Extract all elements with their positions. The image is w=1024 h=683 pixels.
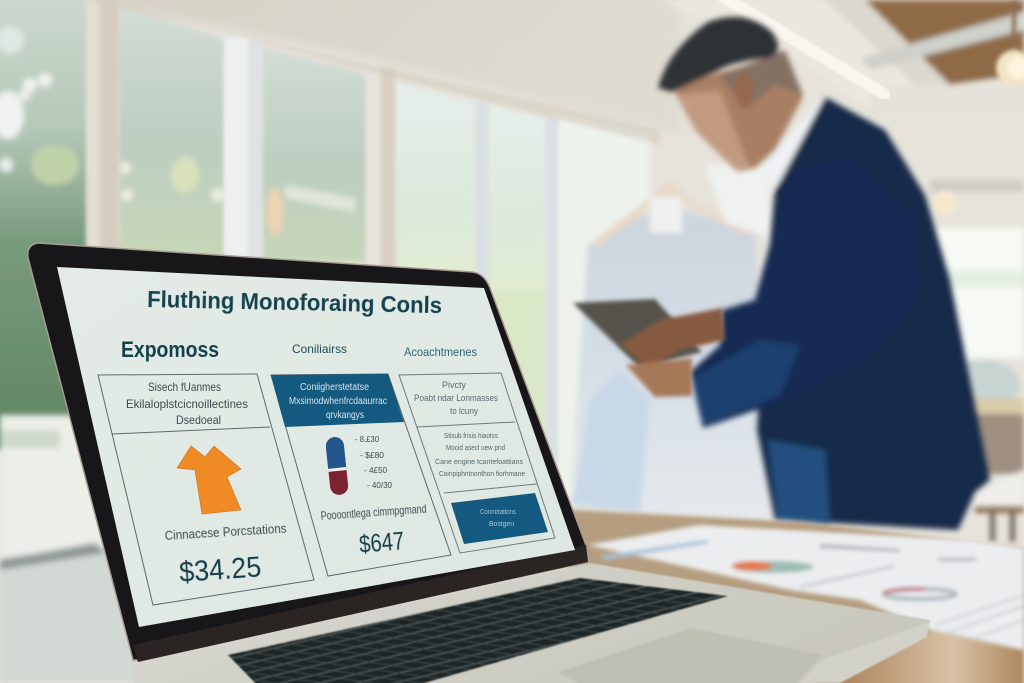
column heading: coniliairss: Coniliairss bbox=[292, 342, 347, 356]
button: blue call to action bbox=[451, 493, 548, 544]
pendant lamps bbox=[933, 0, 1024, 215]
capsule scale labels: - 40/30 bbox=[367, 481, 393, 490]
middle card price: $647 bbox=[358, 527, 405, 559]
ceiling left bbox=[80, 0, 680, 135]
man in navy suit bbox=[658, 17, 990, 530]
window frames bbox=[85, 0, 660, 518]
header text: Coniigherstetatse bbox=[300, 382, 369, 393]
fold line bbox=[800, 566, 895, 587]
chart: donut bbox=[884, 589, 956, 599]
laptop bbox=[28, 243, 930, 683]
capsule scale labels: - $£80 bbox=[360, 451, 385, 460]
button text: Bostgen bbox=[489, 521, 514, 528]
header text bbox=[289, 382, 387, 421]
lower left floor and sill bbox=[0, 415, 200, 683]
left card price: $34.25 bbox=[178, 551, 262, 589]
icon: blue and maroon capsule bbox=[325, 436, 349, 496]
right card detail lines: Cane engine tcantefoattians bbox=[435, 459, 523, 466]
paper reports on desk bbox=[588, 525, 1024, 650]
dashboard title: Fluthing Monoforaing Conls bbox=[147, 286, 442, 318]
right card detail lines: Stisub frisis hiaotss bbox=[444, 433, 498, 440]
left card description bbox=[126, 380, 248, 427]
left card description: Ekilaloplstcicnoillectines bbox=[126, 397, 248, 411]
laptop base bbox=[132, 563, 930, 683]
screen bezel bbox=[28, 243, 588, 660]
wooden desk bbox=[570, 510, 1024, 683]
capsule scale labels bbox=[355, 435, 393, 490]
left card description: Dsedoeal bbox=[176, 413, 221, 427]
ceiling right with wooden beams bbox=[660, 0, 1024, 192]
hinge strip bbox=[133, 545, 588, 662]
report grey bars bbox=[820, 544, 976, 561]
right card detail lines: Mocid asecl uew pnd bbox=[446, 445, 505, 452]
capsule scale labels: - 4£50 bbox=[364, 466, 388, 475]
column heading: expomoss: Expomoss bbox=[121, 337, 219, 362]
man: jacket bbox=[757, 97, 990, 530]
trackpad bbox=[558, 628, 822, 683]
dress on hanger bbox=[570, 165, 770, 525]
capsule scale labels: - 8.£30 bbox=[355, 435, 380, 444]
keyboard bbox=[228, 578, 728, 683]
man: shirt collar bbox=[765, 97, 830, 190]
windows with garden bokeh bbox=[0, 0, 650, 505]
right card summary: Poabt ndar Lonmasses bbox=[414, 393, 498, 403]
man: arm sleeve bbox=[690, 155, 918, 428]
right card summary bbox=[414, 380, 498, 416]
man: lower jacket highlight bbox=[768, 440, 830, 525]
report table bbox=[935, 595, 1024, 638]
right card summary: Pivcty bbox=[442, 380, 466, 390]
right card summary: to lcuny bbox=[450, 406, 478, 416]
panel: left product card bbox=[98, 374, 314, 605]
screen bbox=[57, 267, 575, 627]
left card description: Sisech fUanmes bbox=[148, 380, 221, 394]
column heading: acoachtmenes: Acoachtmenes bbox=[404, 345, 477, 359]
button text: Connotations bbox=[480, 509, 516, 516]
ceiling light strip bbox=[722, 0, 884, 94]
right card detail lines: Coinpiphritnonthon fiorhmane bbox=[439, 471, 525, 478]
chart: donut red arc bbox=[884, 589, 925, 594]
middle card blue header bbox=[271, 374, 404, 427]
header text: Mxsimodwhenfrcdaaurrac bbox=[289, 396, 387, 407]
header text: qrvkangys bbox=[326, 410, 364, 421]
panel: middle card bbox=[271, 374, 451, 576]
man: head and face bbox=[658, 17, 803, 172]
report bar bbox=[600, 540, 710, 560]
right card detail lines bbox=[435, 433, 525, 478]
hands bbox=[620, 308, 725, 397]
icon: orange t-shirt bbox=[177, 446, 241, 514]
middle card label: Poooontlega cimmpgmand bbox=[320, 502, 427, 523]
left card label: Cinnacese Porcstations bbox=[164, 521, 287, 543]
man: forearm highlight bbox=[692, 340, 800, 426]
button text bbox=[480, 509, 516, 528]
right window bbox=[930, 228, 1024, 542]
chart: pie bbox=[732, 561, 814, 573]
tablet bbox=[573, 299, 702, 368]
panel: right card bbox=[399, 373, 555, 553]
